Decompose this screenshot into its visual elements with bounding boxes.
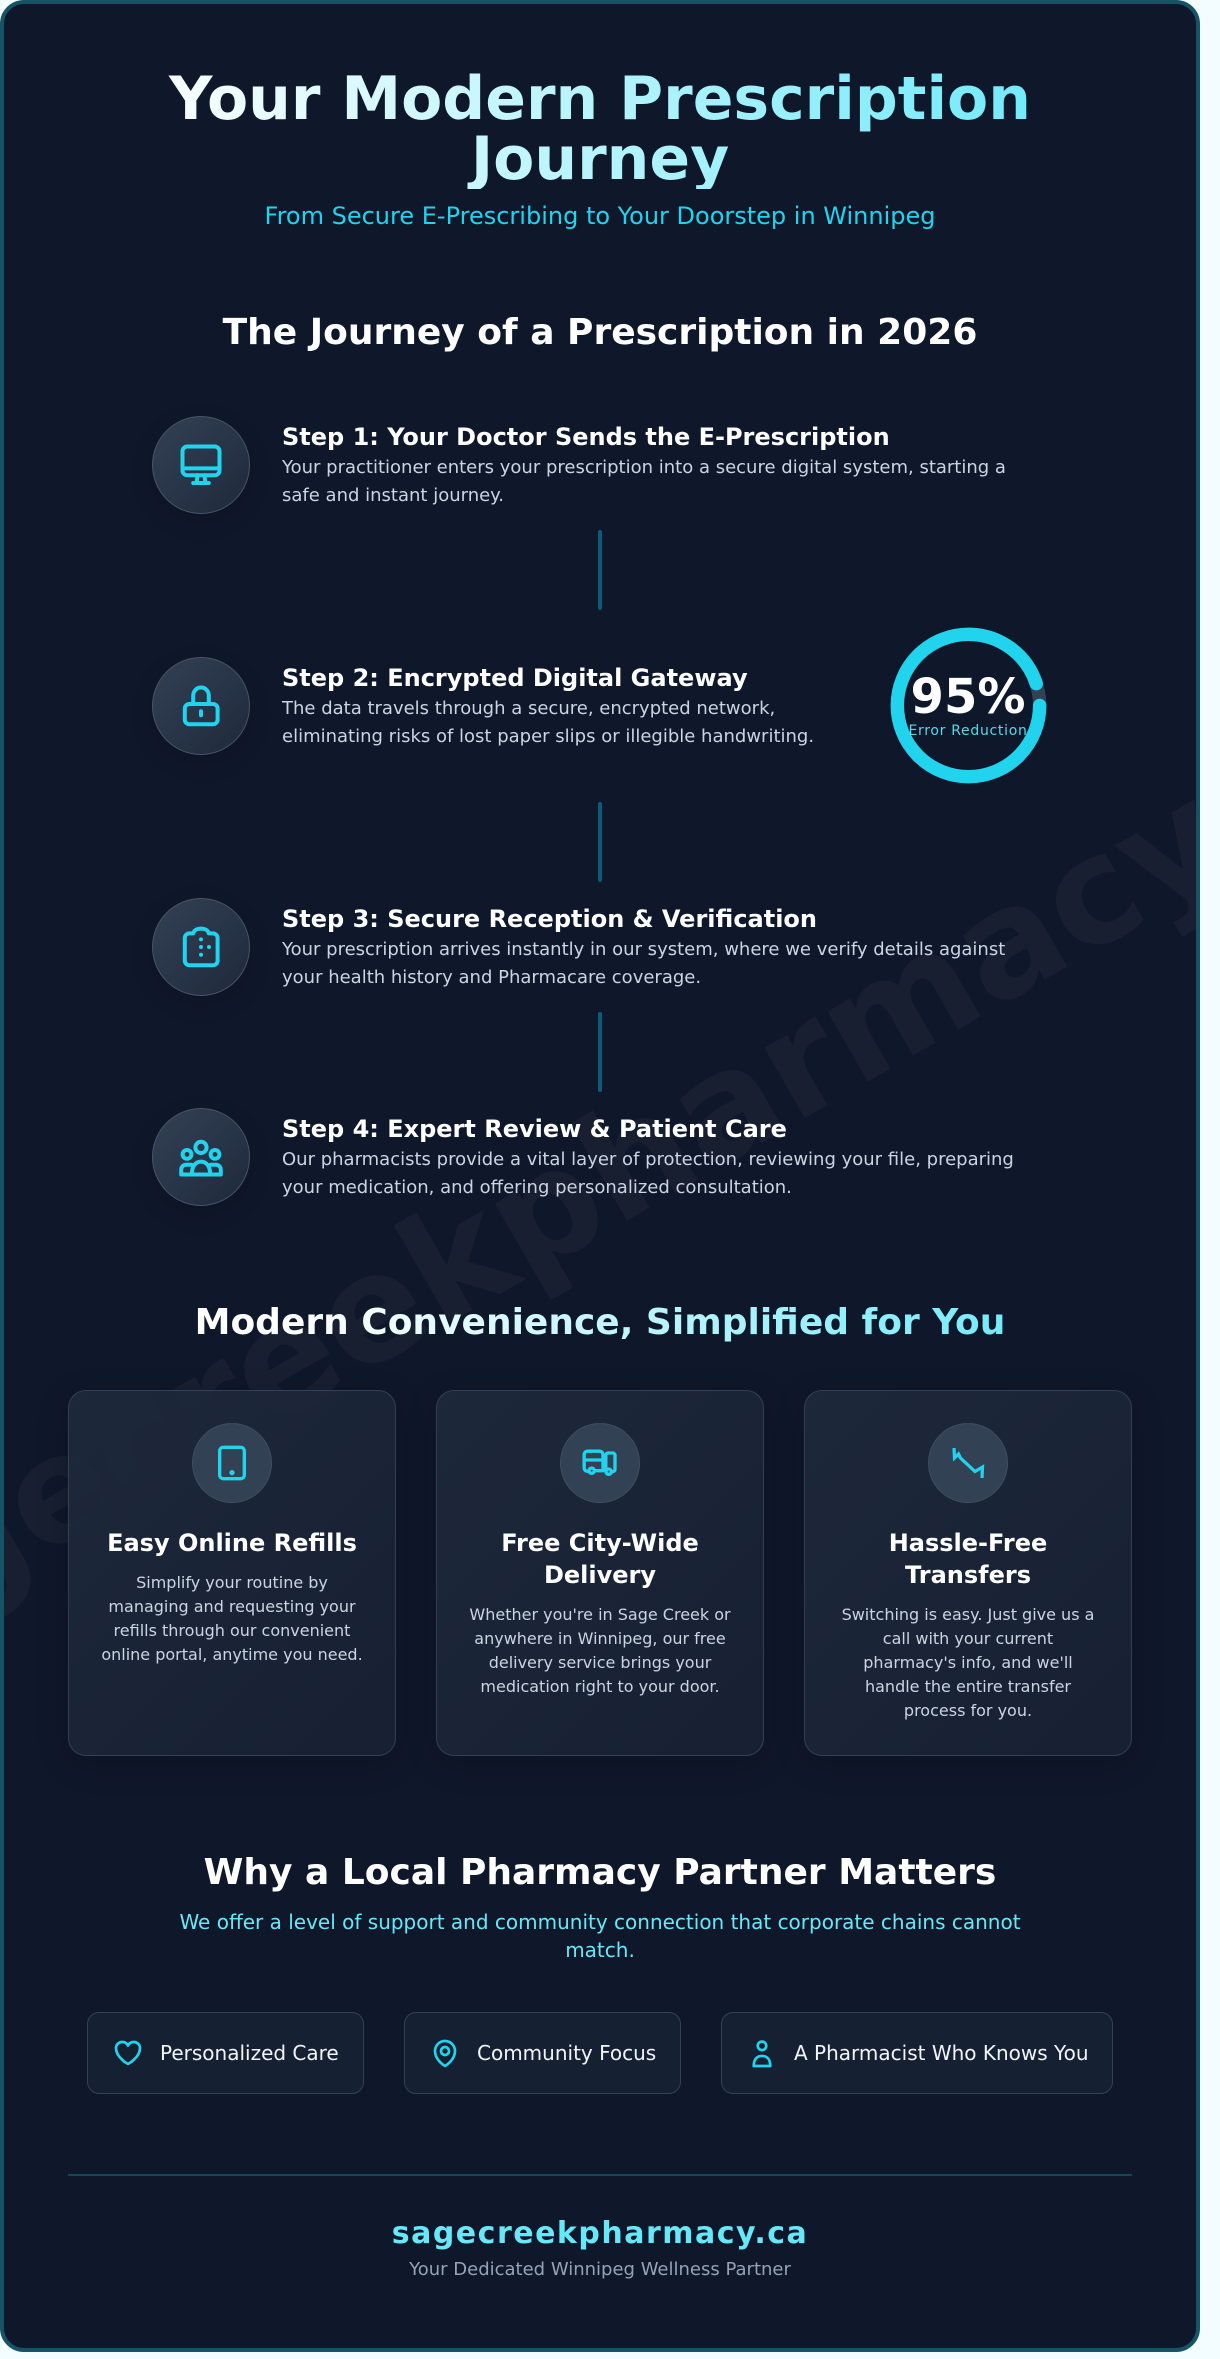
card title: Easy Online Refills (107, 1529, 357, 1557)
stat value: 95% (911, 669, 1025, 725)
icon: step 1 monitor (152, 416, 250, 514)
step 3 text: your health history and Pharmacare coverage. (282, 967, 701, 988)
card text: anywhere in Winnipeg, our free (474, 1629, 726, 1648)
step 3 text (282, 905, 1005, 988)
title: Your Modern Prescription (169, 64, 1031, 134)
step 4 text: Our pharmacists provide a vital layer of protection, reviewing your file, preparing (282, 1149, 1014, 1170)
panel: easy online refills (68, 1390, 396, 1756)
panel: free city-wide delivery (436, 1390, 764, 1756)
card text (842, 1605, 1094, 1720)
card text: managing and requesting your (108, 1597, 356, 1616)
step 2 text: The data travels through a secure, encrypted network, (282, 698, 775, 719)
card title (501, 1529, 699, 1589)
step 2 text: eliminating risks of lost paper slips or illegible handwriting. (282, 726, 814, 747)
panel: hassle-free transfers (804, 1390, 1132, 1756)
connector 2 (598, 802, 602, 882)
icon: step 4 people (152, 1108, 250, 1206)
card text: Whether you're in Sage Creek or (469, 1605, 731, 1624)
card text: delivery service brings your (489, 1653, 711, 1672)
card text: Simplify your routine by (136, 1573, 328, 1592)
section intro text (179, 1910, 1021, 1962)
card text: online portal, anytime you need. (101, 1645, 363, 1664)
step 1 text: Step 1: Your Doctor Sends the E-Prescription (282, 423, 890, 451)
step 4 text: Step 4: Expert Review & Patient Care (282, 1115, 787, 1143)
pill: a pharmacist who knows you (721, 2012, 1113, 2094)
step 4 text: your medication, and offering personalized consultation. (282, 1177, 792, 1198)
card text: handle the entire transfer (865, 1677, 1071, 1696)
connector 3 (598, 1012, 602, 1092)
title (68, 69, 1132, 189)
stat ring: 95% error reduction (890, 628, 1046, 784)
card text: process for you. (904, 1701, 1032, 1720)
heading: convenience: Modern Convenience, Simplified for You (195, 1302, 1005, 1343)
stat label: Error Reduction (908, 723, 1028, 739)
step 4 text (282, 1115, 1014, 1198)
icon: pin (434, 2040, 456, 2068)
card title: Transfers (905, 1561, 1031, 1589)
icon: heart (114, 2040, 142, 2066)
step 1 text: Your practitioner enters your prescription into a secure digital system, starting a (282, 457, 1006, 478)
title: Journey (471, 124, 729, 194)
card text (469, 1605, 731, 1696)
connector 1 (598, 530, 602, 610)
card title: Hassle-Free (889, 1529, 1047, 1557)
section intro text: match. (565, 1938, 635, 1962)
card text: call with your current (883, 1629, 1053, 1648)
footer website: sagecreekpharmacy.ca (392, 2216, 808, 2251)
icon: tablet (192, 1423, 272, 1503)
heading: journey: The Journey of a Prescription in 2026 (223, 312, 977, 353)
card text: medication right to your door. (480, 1677, 720, 1696)
pill: personalized care (87, 2012, 364, 2094)
card text: refills through our convenient (114, 1621, 350, 1640)
card text: Switching is easy. Just give us a (842, 1605, 1094, 1624)
icon: step 2 lock (152, 657, 250, 755)
card title: Free City-Wide (501, 1529, 699, 1557)
icon: person (752, 2040, 772, 2068)
footer tagline: Your Dedicated Winnipeg Wellness Partner (409, 2259, 791, 2280)
card text: pharmacy's info, and we'll (863, 1653, 1073, 1672)
section intro text: We offer a level of support and community connection that corporate chains cannot (179, 1910, 1021, 1934)
icon: transfer (928, 1423, 1008, 1503)
label: Community Focus (477, 2041, 656, 2065)
step 3 text: Your prescription arrives instantly in our system, where we verify details against (282, 939, 1005, 960)
icon: truck (560, 1423, 640, 1503)
card title: Delivery (544, 1561, 656, 1589)
step 3 text: Step 3: Secure Reception & Verification (282, 905, 817, 933)
card text (101, 1573, 363, 1664)
card title (889, 1529, 1047, 1589)
step 1 text: safe and instant journey. (282, 485, 504, 506)
step 1 text (282, 423, 1006, 506)
heading: local partner: Why a Local Pharmacy Partner Matters (204, 1852, 996, 1893)
subtitle: From Secure E-Prescribing to Your Doorstep in Winnipeg (265, 202, 935, 230)
icon: step 3 clipboard (152, 898, 250, 996)
step 2 text: Step 2: Encrypted Digital Gateway (282, 664, 748, 692)
step 2 text (282, 664, 814, 747)
pill: community focus (404, 2012, 681, 2094)
label: A Pharmacist Who Knows You (794, 2041, 1088, 2065)
label: Personalized Care (160, 2041, 339, 2065)
